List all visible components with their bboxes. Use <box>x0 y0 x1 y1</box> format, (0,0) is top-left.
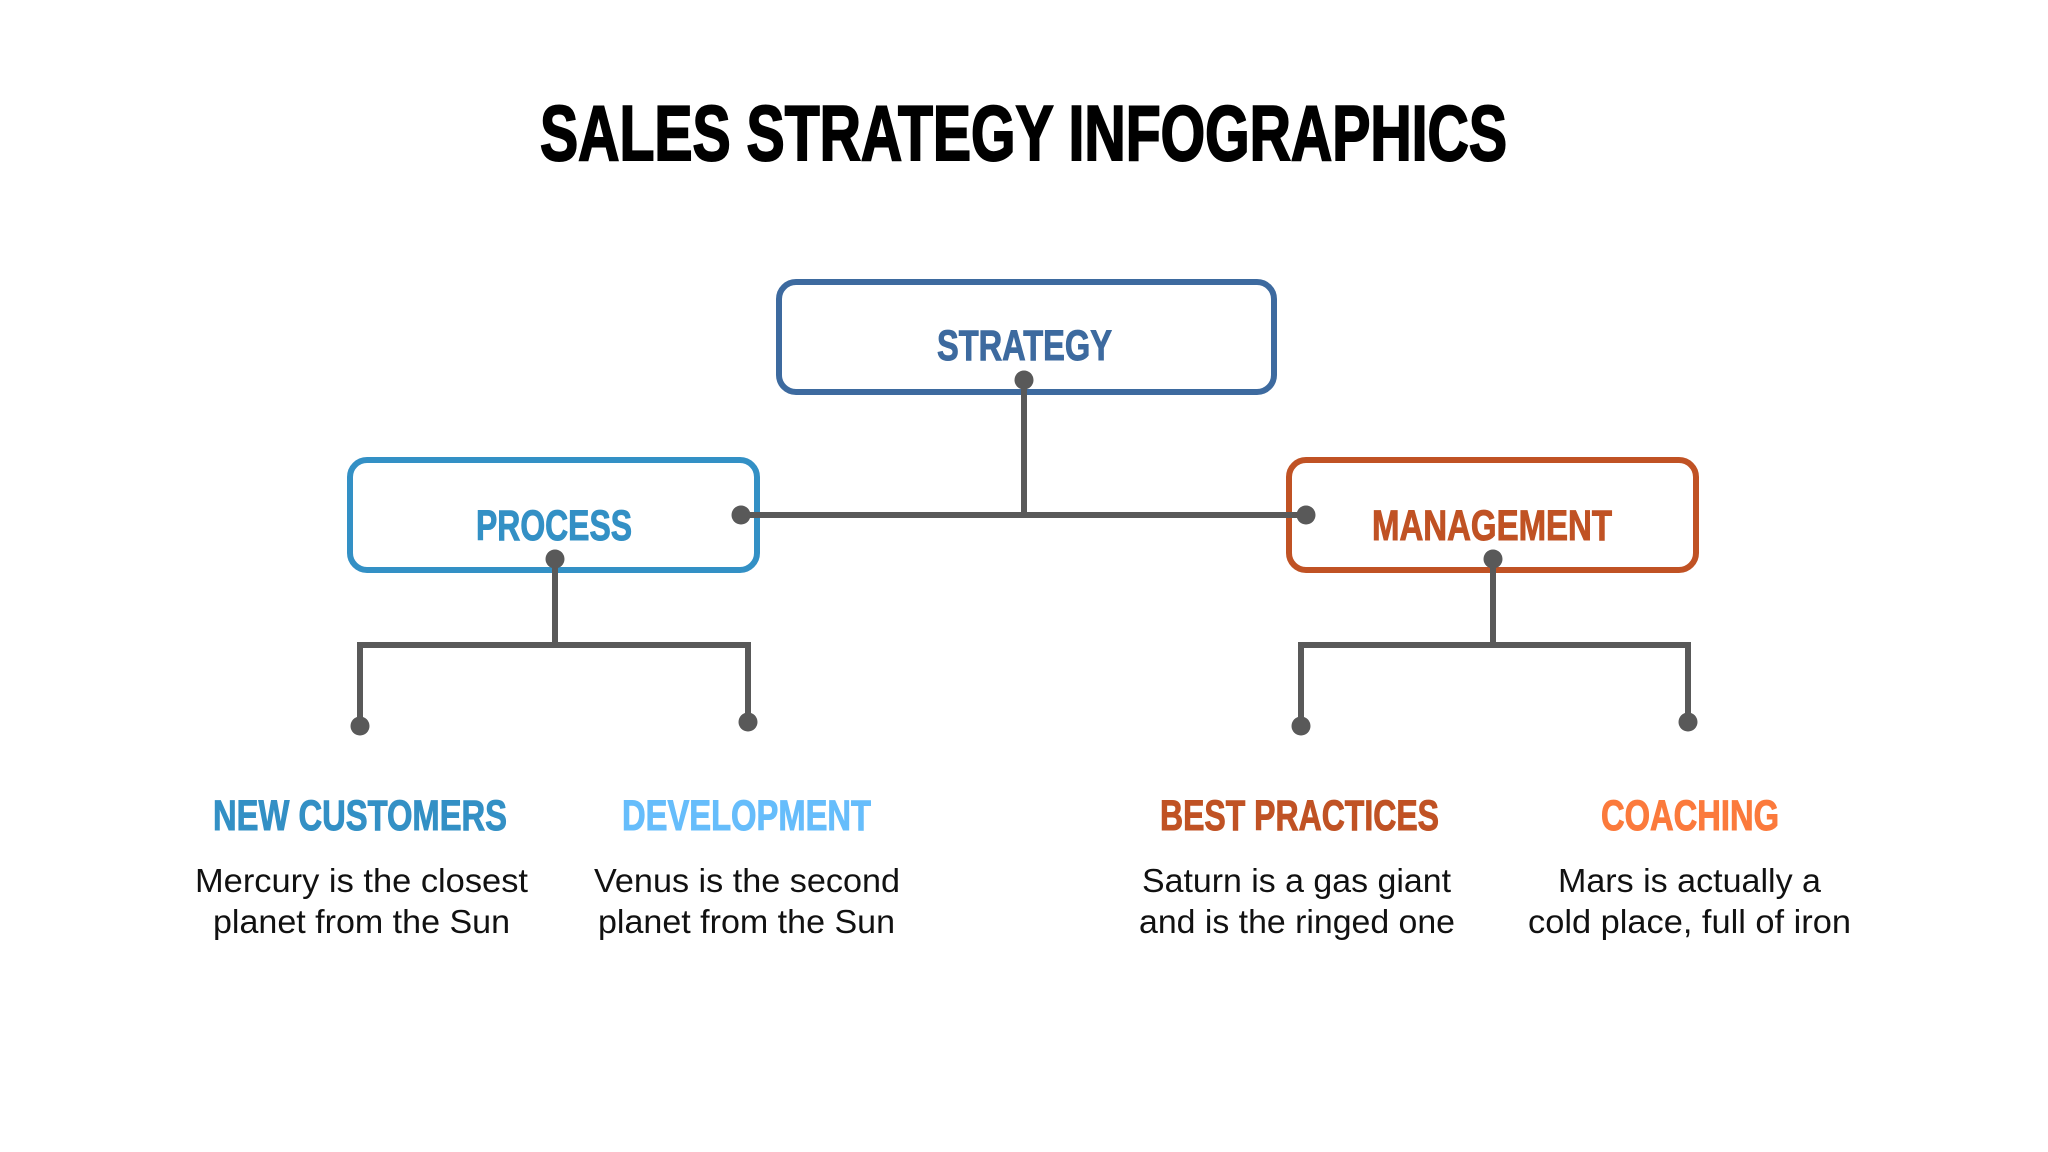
heading: strategy: STRATEGY <box>937 322 1112 370</box>
block: development <box>594 792 900 940</box>
heading: development: DEVELOPMENT <box>622 792 871 840</box>
heading: coaching: COACHING <box>1601 792 1779 840</box>
connector: management to children <box>1292 550 1698 736</box>
text: saturn <box>1139 862 1455 940</box>
heading: process: PROCESS <box>476 502 632 550</box>
text: mars <box>1528 862 1851 940</box>
text: saturn: and is the ringed one <box>1139 903 1455 940</box>
block: new customers <box>195 792 528 940</box>
text: venus: Venus is the second <box>594 862 900 899</box>
block: best practices <box>1139 792 1455 940</box>
panel: strategy box <box>779 282 1274 392</box>
text: mercury <box>195 862 528 940</box>
text: mercury: Mercury is the closest <box>195 862 528 899</box>
connector: strategy to process and management <box>732 370 1316 524</box>
text: venus: planet from the Sun <box>598 903 895 940</box>
connector: process to children <box>350 550 758 736</box>
heading: new customers: NEW CUSTOMERS <box>213 792 507 840</box>
heading: management: MANAGEMENT <box>1372 502 1612 550</box>
text: venus <box>594 862 900 940</box>
panel: process box <box>350 460 757 570</box>
block: coaching <box>1528 792 1851 940</box>
panel: management box <box>1289 460 1696 570</box>
text: saturn: Saturn is a gas giant <box>1142 862 1451 899</box>
text: mars: cold place, full of iron <box>1528 903 1851 940</box>
title: SALES STRATEGY INFOGRAPHICS <box>540 89 1507 177</box>
text: mars: Mars is actually a <box>1558 862 1822 899</box>
text: mercury: planet from the Sun <box>213 903 510 940</box>
heading: best practices: BEST PRACTICES <box>1160 792 1439 840</box>
